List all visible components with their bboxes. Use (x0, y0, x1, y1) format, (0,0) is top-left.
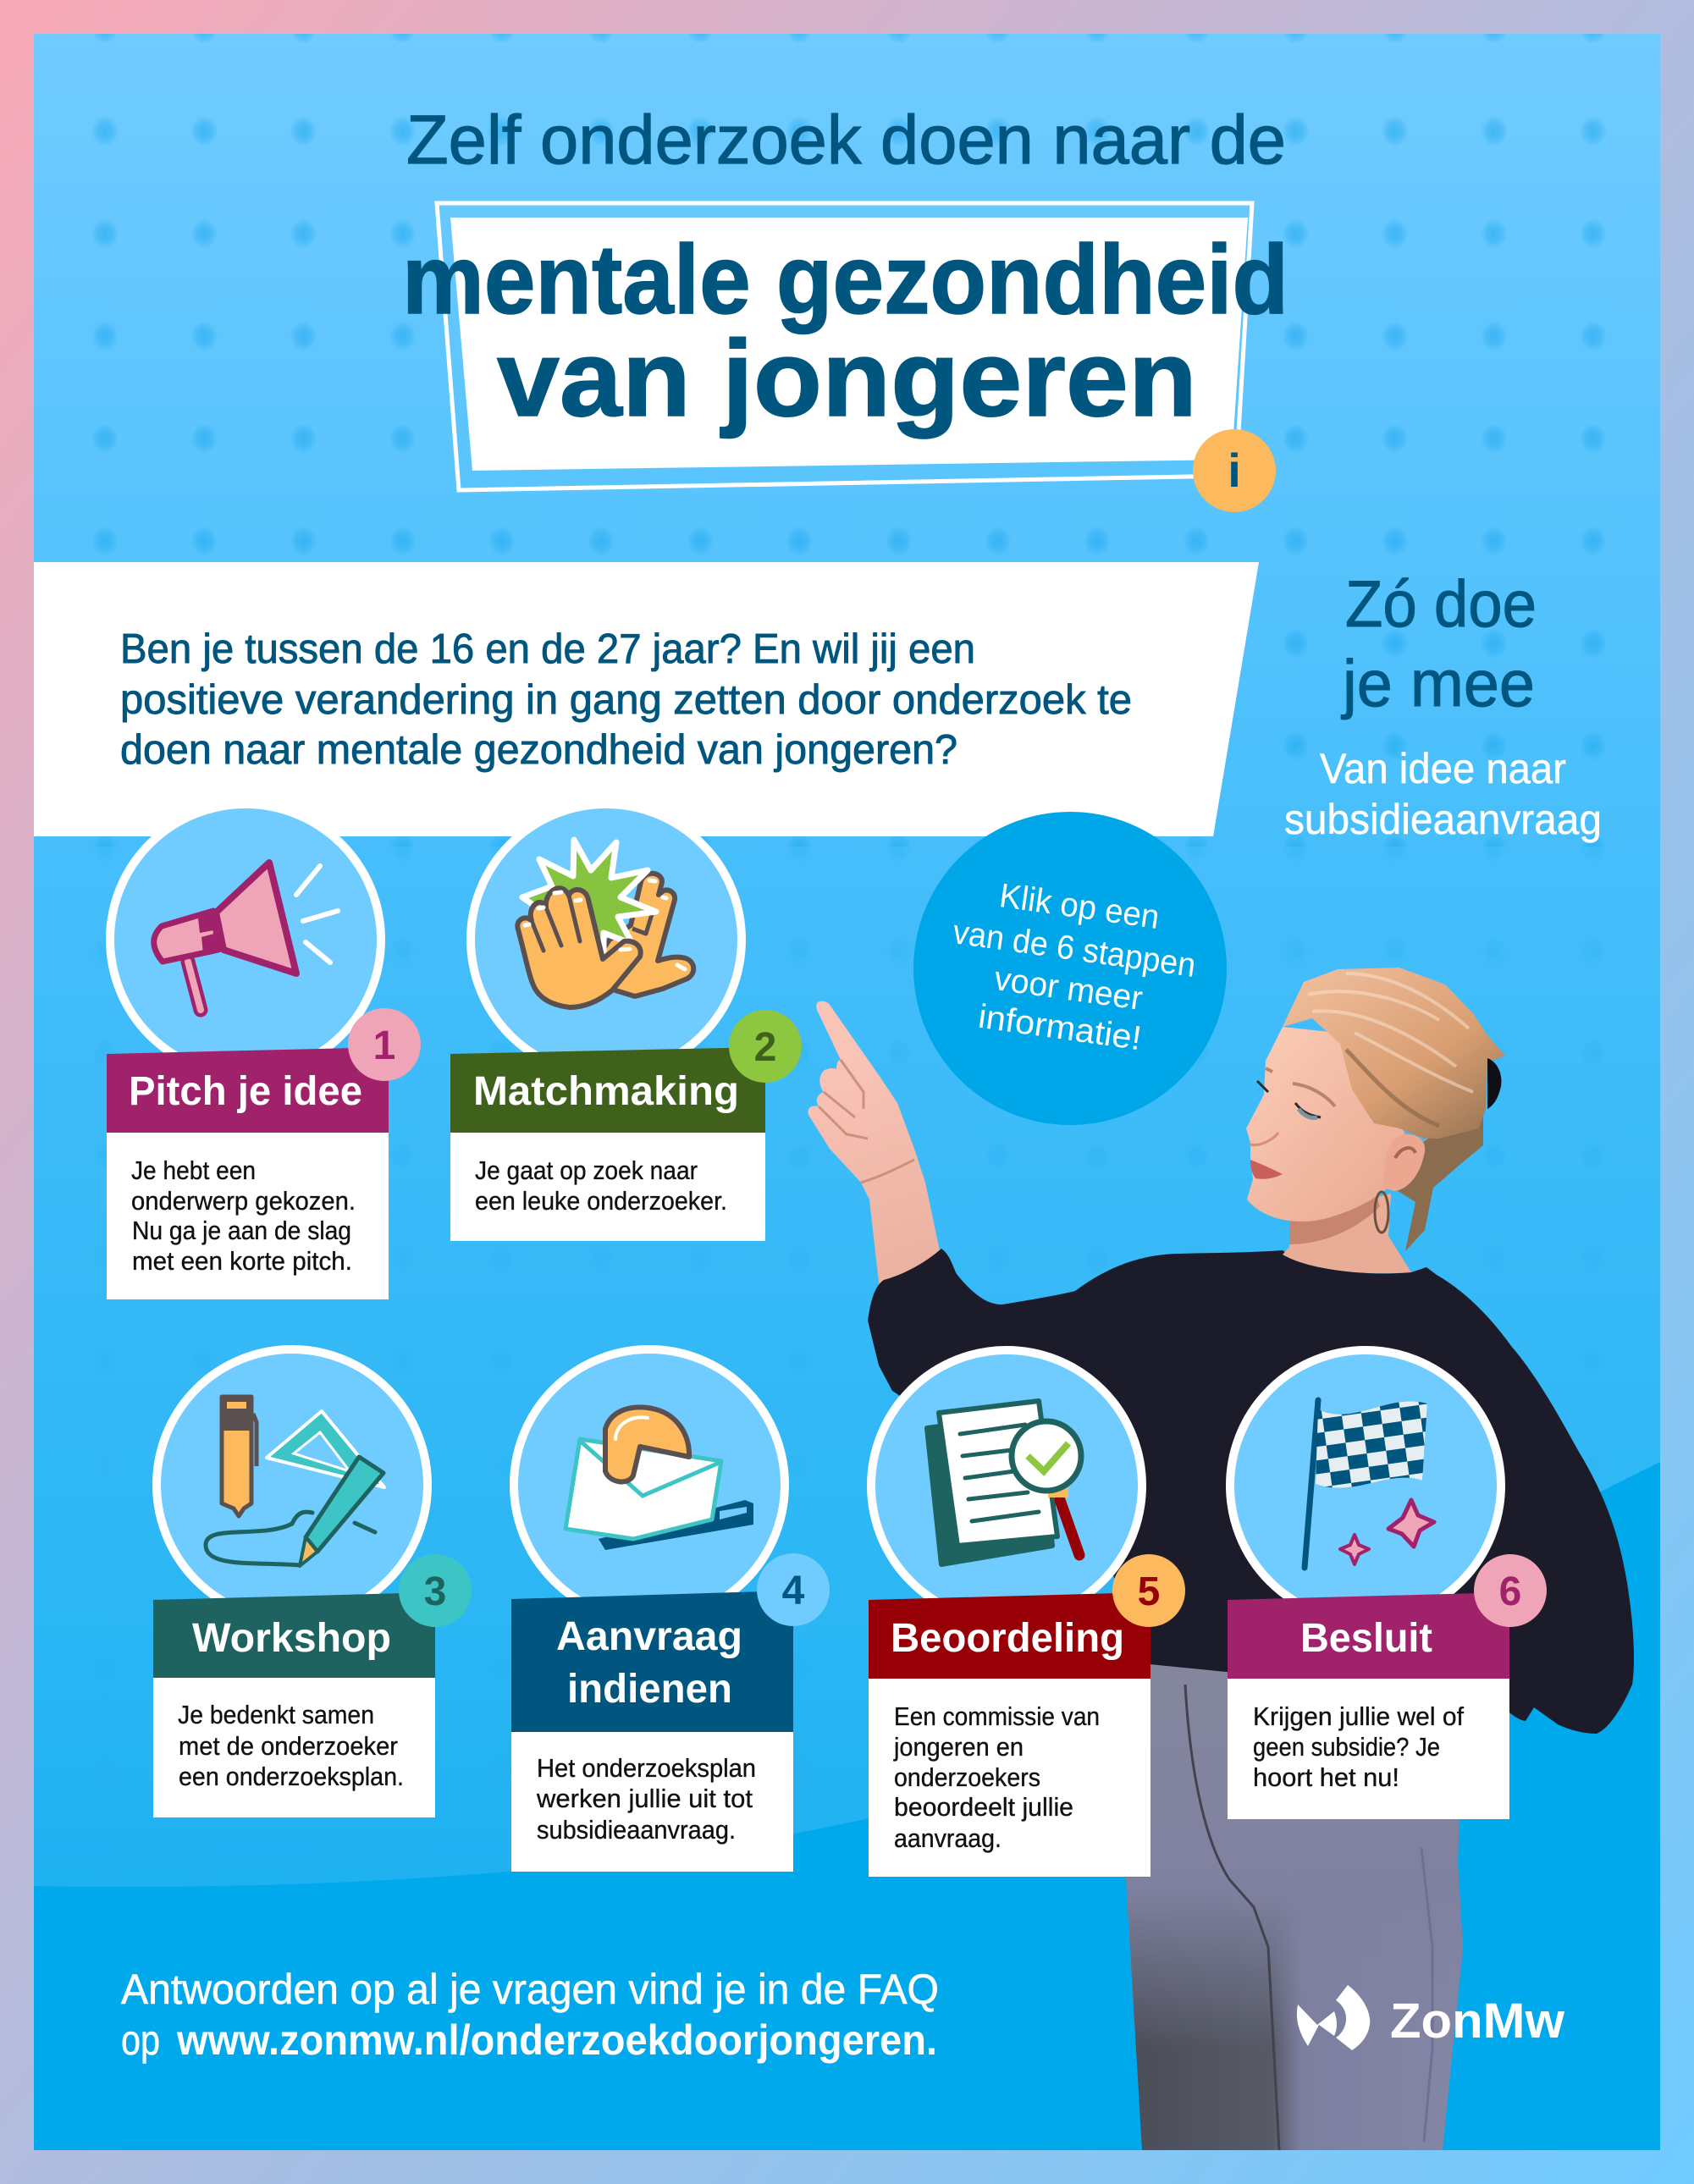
step 6: Besluit: Krijgen jullie wel of (1253, 1701, 1464, 1731)
callout circle: click a step: voor meer (992, 960, 1145, 1018)
step 6: Besluit: 6 (1499, 1569, 1521, 1614)
title block with white frame: van jongeren (497, 318, 1197, 439)
info badge: i (1228, 444, 1241, 497)
back hair (1388, 1100, 1483, 1251)
person pointing at the steps (808, 968, 1634, 2150)
footer text: FAQ link (121, 1966, 939, 2064)
icon circle: document with magnifier (871, 1350, 1142, 1621)
step 1: Pitch je idee: Nu ga je aan de slag (132, 1216, 351, 1245)
icon circle: envelope (514, 1349, 785, 1620)
side heading: Zó doe je mee: Van idee naar (1320, 745, 1566, 792)
header (511, 1591, 793, 1732)
step 1: Pitch je idee: Pitch je idee (129, 1069, 362, 1114)
number badge (1112, 1554, 1185, 1627)
number badge (757, 1553, 830, 1626)
side heading: Zó doe je mee (1284, 566, 1602, 843)
jeans (1126, 1659, 1509, 2150)
step 1: Pitch je idee: met een korte pitch. (132, 1246, 352, 1276)
step 4: Aanvraag indienen: Het onderzoeksplan (537, 1753, 756, 1783)
forearm and pointing hand (808, 1001, 945, 1298)
heading line: Zelf onderzoek doen naar de: Zelf onderzoek doen naar de (406, 102, 1286, 179)
step 1: Pitch je idee (107, 804, 421, 1299)
title block with white frame: mentale gezondheid (402, 224, 1288, 334)
intro banner: Ben je tussen de 16 en de 27 jaar? En wil jij een (120, 626, 975, 672)
ZonMw logo: ZonMw (1390, 1994, 1565, 2049)
callout circle: click a step: Klik op een (997, 877, 1162, 936)
body (511, 1732, 793, 1872)
side heading: Zó doe je mee: subsidieaanvraag (1284, 796, 1602, 843)
step 3: Workshop: een onderzoeksplan. (179, 1762, 404, 1791)
body (450, 1133, 765, 1241)
callout circle: click a step: van de 6 stappen (951, 913, 1198, 984)
side heading: Zó doe je mee: je mee (1341, 646, 1535, 720)
callout circle: click a step: informatie! (976, 998, 1144, 1057)
step 1: Pitch je idee: Je hebt een (131, 1155, 256, 1185)
header (450, 1047, 765, 1133)
header (869, 1592, 1150, 1679)
intro banner (34, 562, 1259, 836)
step 5: Beoordeling: 5 (1138, 1569, 1160, 1614)
side heading: Zó doe je mee: Zó doe (1345, 566, 1537, 641)
hair (1283, 968, 1505, 1139)
callout circle: click a step (913, 812, 1227, 1125)
icon circle: drawing tools (157, 1349, 428, 1620)
hair clip (1487, 1058, 1501, 1109)
ear (1382, 1134, 1425, 1191)
step 2: Matchmaking: Je gaat op zoek naar (475, 1155, 698, 1185)
step 2: Matchmaking: een leuke onderzoeker. (475, 1186, 727, 1216)
footer text: FAQ link: Antwoorden op al je vragen vind je in de FAQ (121, 1966, 939, 2013)
body (1228, 1679, 1509, 1819)
intro banner: positieve verandering in gang zetten door onderzoek te (120, 677, 1132, 723)
step 4: Aanvraag indienen: subsidieaanvraag. (537, 1815, 736, 1845)
number badge (1474, 1554, 1547, 1627)
step 5: Beoordeling: aanvraag. (894, 1823, 1002, 1853)
step 5: Beoordeling: Een commissie van (894, 1701, 1100, 1731)
header (153, 1592, 435, 1678)
step 3: Workshop: Workshop (192, 1616, 391, 1661)
facial features (1257, 1081, 1321, 1117)
earring (1375, 1192, 1388, 1233)
step 5: Beoordeling: jongeren en (893, 1732, 1024, 1762)
header (107, 1047, 389, 1133)
footer text: FAQ link: op (121, 2016, 160, 2064)
step 5: Beoordeling: onderzoekers (894, 1762, 1040, 1792)
info badge (1193, 429, 1276, 512)
step 5: Beoordeling: Beoordeling (891, 1616, 1124, 1661)
step 6: Besluit: hoort het nu! (1253, 1762, 1399, 1792)
number badge (348, 1008, 421, 1081)
sweater (868, 1249, 1634, 1734)
step 3: Workshop: 3 (424, 1569, 446, 1614)
step 5: Beoordeling (869, 1350, 1185, 1877)
icon circle: checkered flag (1230, 1350, 1501, 1621)
step 4: Aanvraag indienen: Aanvraag (556, 1614, 742, 1659)
body (107, 1133, 389, 1299)
bottom wave (34, 1462, 1660, 2150)
icon circle: megaphone (110, 804, 381, 1075)
step 4: Aanvraag indienen: indienen (567, 1667, 732, 1712)
step 2: Matchmaking (450, 804, 802, 1241)
face (1246, 1027, 1410, 1221)
ZonMw logo (1297, 1985, 1565, 2050)
finger shading (819, 1060, 914, 1183)
step 3: Workshop: Je bedenkt samen (178, 1700, 374, 1729)
step 5: Beoordeling: beoordeelt jullie (894, 1792, 1073, 1822)
intro banner: doen naar mentale gezondheid van jongeren? (120, 727, 957, 773)
step 1: Pitch je idee: onderwerp gekozen. (131, 1186, 356, 1216)
step 6: Besluit (1228, 1350, 1547, 1819)
neck (1283, 1194, 1411, 1273)
body (869, 1679, 1150, 1877)
step 2: Matchmaking: 2 (754, 1025, 776, 1070)
icon circle: high five (471, 804, 742, 1075)
step 3: Workshop: met de onderzoeker (179, 1731, 398, 1761)
footer text: FAQ link: www.zonmw.nl/onderzoekdoorjongeren. (176, 2016, 937, 2064)
step 4: Aanvraag indienen: werken jullie uit tot (536, 1784, 753, 1813)
step 1: Pitch je idee: 1 (373, 1023, 395, 1068)
number badge (399, 1554, 472, 1627)
step 3: Workshop (153, 1349, 472, 1817)
number badge (729, 1010, 802, 1083)
step 6: Besluit: geen subsidie? Je (1253, 1732, 1440, 1762)
step 2: Matchmaking: Matchmaking (473, 1069, 739, 1114)
step 4: Aanvraag indienen (511, 1349, 830, 1872)
step 6: Besluit: Besluit (1300, 1616, 1432, 1661)
header (1228, 1592, 1509, 1679)
body (153, 1678, 435, 1817)
step 4: Aanvraag indienen: 4 (782, 1569, 805, 1613)
title block with white frame (402, 203, 1288, 490)
